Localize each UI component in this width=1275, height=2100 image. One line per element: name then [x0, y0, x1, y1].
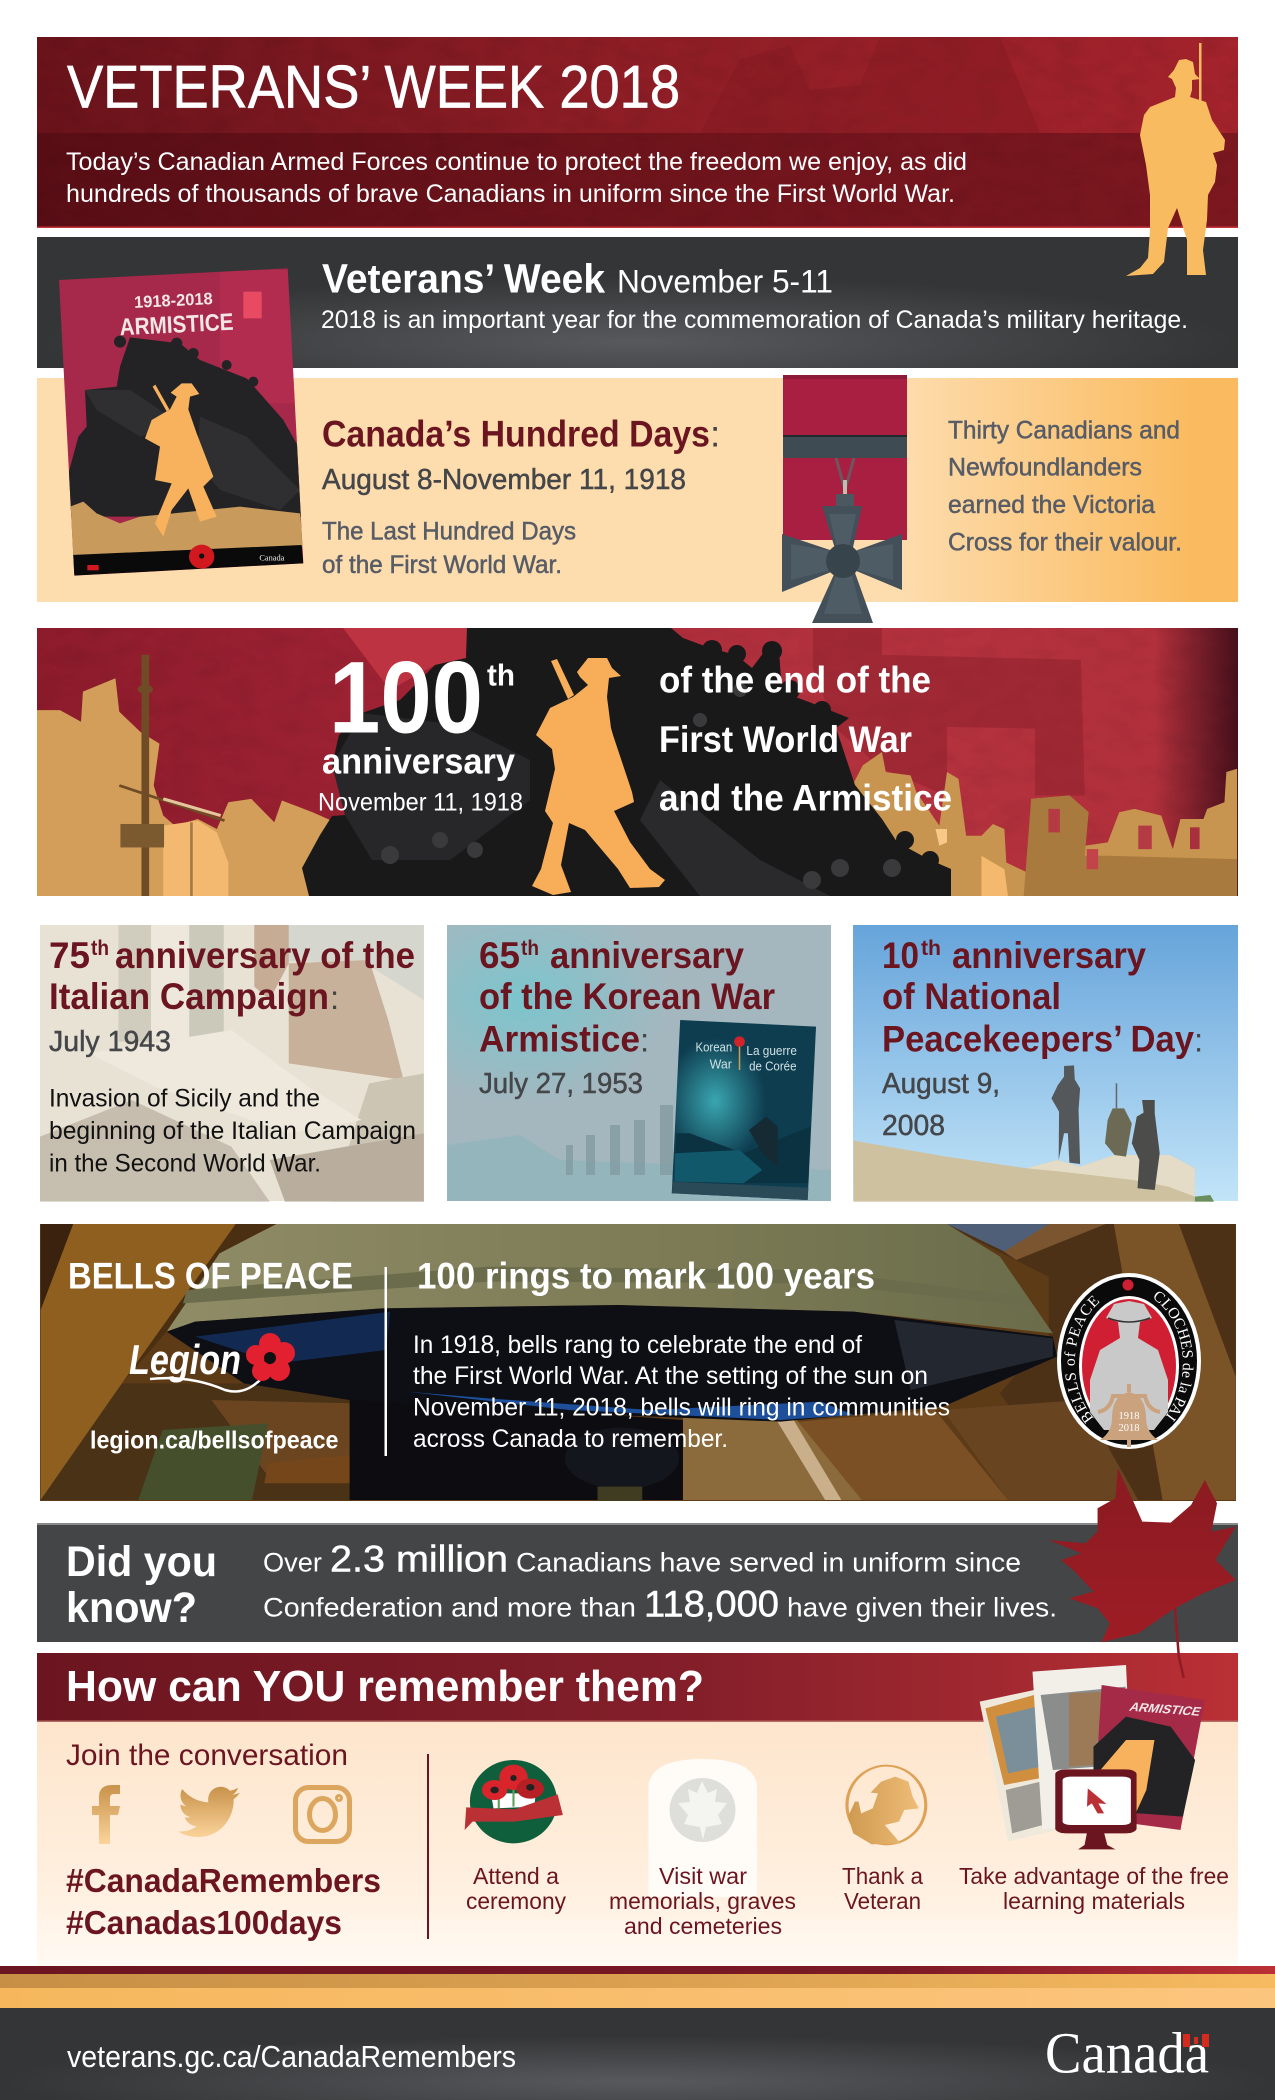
description right: earned the Victoria [948, 491, 1155, 519]
anniversary statement: and the Armistice [659, 778, 952, 818]
label [842, 1863, 924, 1914]
statistics text [263, 1538, 1057, 1624]
icon: Bells of Peace badge [1057, 1273, 1201, 1449]
bell text: across Canada to remember. [413, 1425, 728, 1453]
card heading [882, 935, 1194, 1060]
book title: War [710, 1057, 732, 1071]
card text: beginning of the Italian Campaign [49, 1117, 416, 1145]
card date: July 27, 1953 [479, 1068, 643, 1100]
description right: Thirty Canadians and [948, 416, 1180, 444]
card date: August 9, [882, 1068, 1000, 1100]
heading: 100 rings: 100 rings to mark 100 years [417, 1256, 875, 1296]
label: Take advantage of the free [959, 1863, 1229, 1889]
panel: How can YOU remember them [37, 1653, 1238, 1966]
card heading: Peacekeepers’ Day [882, 1018, 1194, 1060]
divider [384, 1267, 387, 1456]
panel: footer [0, 2008, 1275, 2100]
badge year 1918: 1918 [1118, 1411, 1140, 1422]
panel: Korean War card [447, 925, 831, 1201]
description right: Newfoundlanders [948, 454, 1142, 482]
book title: La guerre [746, 1044, 797, 1058]
icon: ceremony poppies and ribbon [465, 1760, 563, 1843]
statistics text: have given their lives. [787, 1592, 1057, 1622]
icon: Twitter [178, 1787, 240, 1837]
card heading [479, 935, 775, 1060]
card heading: anniversary [952, 935, 1146, 976]
URL: legion.ca/bellsofpeace [90, 1426, 339, 1454]
heading: Canada's Hundred Days: Canada’s Hundred Days [322, 414, 710, 454]
footer URL: veterans.gc.ca/CanadaRemembers [67, 2039, 516, 2074]
badge text right: CLOCHES de la PAIX [1154, 1292, 1194, 1422]
statistics text: 2.3 million [330, 1538, 508, 1580]
image: Korean War book cover [672, 1020, 816, 1200]
materials poster title: ARMISTICE [1127, 1700, 1204, 1719]
label [609, 1863, 796, 1939]
card heading: th [521, 937, 539, 960]
card date [882, 1068, 1000, 1142]
Canada wordmark: Canada [1045, 2020, 1209, 2086]
heading: How can YOU remember them: How can YOU remember them? [66, 1662, 704, 1711]
anniversary label: th [487, 658, 515, 692]
anniversary statement: First World War [659, 719, 912, 760]
panel: Italian Campaign card [40, 925, 424, 1202]
label: memorials, graves [609, 1888, 796, 1914]
card heading: th [91, 937, 109, 960]
heading: Bells of Peace: BELLS OF PEACE [68, 1256, 353, 1296]
anniversary label: anniversary [322, 740, 515, 782]
icon: standing soldier silhouette [1126, 43, 1225, 276]
divider [427, 1754, 429, 1939]
book title: Korean [695, 1041, 732, 1054]
header intro text: hundreds of thousands of brave Canadians in uniform since the First World War. [66, 180, 955, 208]
title: VETERANS’ WEEK 2018 [67, 54, 680, 120]
label: learning materials [1003, 1888, 1185, 1914]
label [466, 1863, 566, 1914]
icon: Legion logo [129, 1333, 295, 1392]
photo: bell and wooden frame [41, 1224, 1236, 1501]
decorative footer stripes [0, 1966, 1275, 2008]
ruins silhouette, right [844, 752, 1237, 898]
icon: thank a veteran [847, 1766, 926, 1844]
label: ceremony [466, 1888, 566, 1914]
statistics text: Canadians have served in uniform since [516, 1548, 1021, 1578]
card heading: Italian Campaign [49, 976, 329, 1017]
Join the conversation: Join the conversation [66, 1739, 348, 1772]
panel: Veterans' Week dark band [37, 237, 1238, 368]
Veterans' Week heading: Veterans’ Week [322, 256, 605, 302]
badge text left: BELLS of PEACE [1064, 1295, 1100, 1424]
card heading: th [921, 937, 941, 960]
poster title [120, 292, 233, 336]
icon: Legion logo: Legion [129, 1336, 241, 1383]
card text: in the Second World War. [49, 1150, 321, 1178]
hashtags: #Canadas100days [66, 1904, 342, 1941]
ruins silhouette, left [37, 654, 330, 896]
label: and cemeteries [624, 1913, 782, 1939]
bell text: November 11, 2018, bells will ring in communities [413, 1394, 950, 1422]
dates: August 8-November 11, 1918 [322, 464, 686, 496]
panel: Canada's Hundred Days [37, 378, 1238, 602]
card heading: 10 [882, 935, 919, 976]
ruined building shape, right [813, 628, 1085, 796]
description left: The Last Hundred Days [322, 518, 576, 546]
panel: Peacekeepers' Day card [853, 925, 1238, 1202]
panel: Bells of Peace [40, 1224, 1236, 1501]
card heading: 75 [49, 935, 90, 976]
band text: 2018 is an important year for the commemoration of Canada’s military heritage. [321, 306, 1188, 334]
card date: July 1943 [49, 1026, 171, 1058]
card heading: of National [882, 976, 1061, 1017]
colon: : [1194, 1022, 1203, 1058]
soldiers and tank, greyscale photo [302, 628, 951, 898]
anniversary statement: of the end of the [659, 660, 931, 700]
icon: tombstone with maple leaf [648, 1759, 757, 1897]
anniversary statement [659, 660, 952, 818]
hashtags [66, 1862, 381, 1941]
panel: header banner [37, 37, 1238, 228]
header intro text: Today’s Canadian Armed Forces continue to protect the freedom we enjoy, as did [66, 148, 967, 176]
icon: maple leaf [1049, 1468, 1236, 1678]
statistics text: Over [263, 1548, 322, 1578]
card heading: of the Korean War [479, 976, 775, 1017]
card heading: 65 [479, 935, 520, 976]
card heading: anniversary of the [115, 935, 415, 976]
hashtags: #CanadaRemembers [66, 1862, 381, 1899]
card date: 2008 [882, 1110, 945, 1142]
label: Visit war [659, 1863, 747, 1889]
image: peacekeeping monument [854, 1065, 1214, 1202]
colon: : [710, 414, 720, 454]
description left: of the First World War. [322, 551, 562, 579]
bell text [413, 1331, 950, 1453]
icon: Facebook [92, 1785, 120, 1844]
anniversary label: 100 [329, 640, 483, 754]
badge year 2018: 2018 [1118, 1423, 1140, 1434]
bell text: In 1918, bells rang to celebrate the end of [413, 1331, 862, 1359]
icon: marching soldier silhouette [532, 658, 665, 895]
heading: Did you know: know? [66, 1584, 197, 1632]
card heading: Armistice [479, 1018, 640, 1060]
label: Thank a [842, 1863, 924, 1889]
label: Attend a [473, 1863, 560, 1889]
card text: Invasion of Sicily and the [49, 1084, 320, 1112]
header intro text [66, 148, 967, 208]
image: Armistice poster [59, 268, 303, 576]
description right: Cross for their valour. [948, 528, 1182, 556]
bell text: the First World War. At the setting of the sun on [413, 1362, 928, 1390]
description right [948, 416, 1182, 556]
statistics text: 118,000 [644, 1584, 779, 1624]
poster title: ARMISTICE [119, 309, 234, 341]
card heading: anniversary [550, 935, 744, 976]
description left [322, 518, 576, 579]
panel: Did you know [37, 1523, 1238, 1642]
book title [695, 1041, 797, 1073]
anniversary label [320, 661, 522, 814]
poster wordmark: Canada [259, 554, 285, 563]
icon: learning materials and monitor [980, 1665, 1205, 1849]
icon: Instagram [296, 1788, 350, 1842]
card text [49, 1084, 416, 1178]
colon: : [640, 1022, 649, 1058]
date: November 5-11 [617, 264, 833, 300]
image: Victoria Cross medal [782, 375, 907, 623]
card heading [49, 935, 415, 1017]
anniversary label: November 11, 1918 [318, 788, 523, 816]
label: Veteran [844, 1888, 921, 1914]
heading: Did you know [66, 1538, 217, 1632]
label [959, 1863, 1229, 1914]
book title: de Corée [749, 1060, 797, 1073]
panel: 100th anniversary banner [37, 628, 1238, 898]
poster title: 1918-2018 [134, 289, 213, 312]
monitor [1055, 1769, 1137, 1833]
heading: Did you know: Did you [66, 1538, 217, 1586]
statistics text: Confederation and more than [263, 1592, 636, 1622]
colon: : [330, 979, 339, 1016]
